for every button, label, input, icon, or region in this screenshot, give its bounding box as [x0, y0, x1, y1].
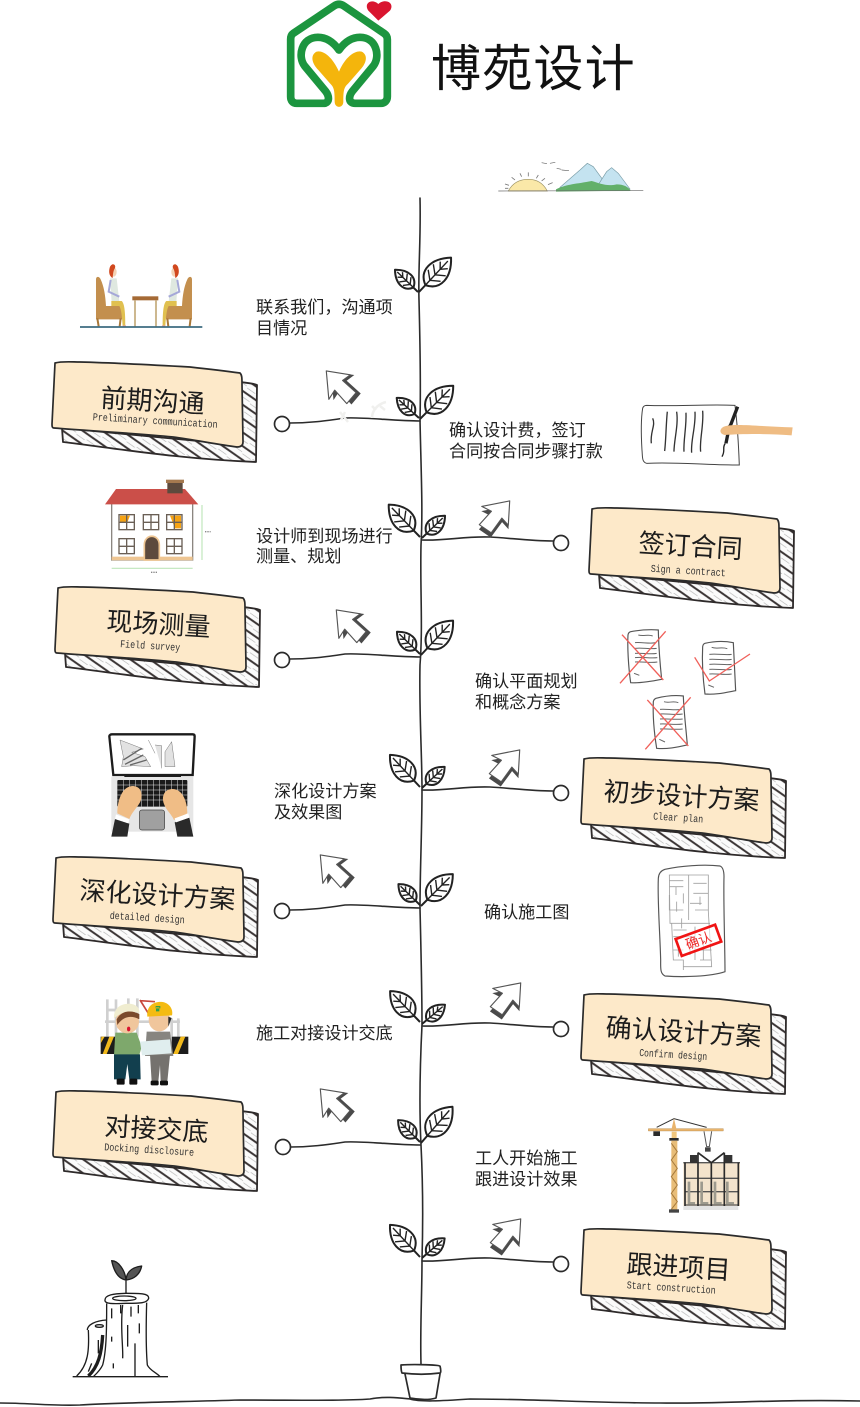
icon: rejected and approved drafts — [620, 630, 750, 749]
description: step 3: 测量、规划 — [256, 547, 341, 566]
arrow 2 — [469, 489, 523, 544]
card: 跟进项目 — [581, 1229, 786, 1329]
description: step 1: 联系我们，沟通项 — [256, 298, 393, 317]
arrow 4 — [479, 738, 533, 793]
card: 前期沟通: 前期沟通 — [100, 383, 205, 419]
card: 签订合同: 签订合同 — [638, 528, 743, 564]
icon: two construction workers — [101, 998, 188, 1085]
description: step 6: 确认施工图 — [484, 903, 569, 922]
card: 跟进项目: 跟进项目 — [626, 1249, 731, 1285]
icon: hands typing on laptop — [109, 734, 195, 837]
card: 初步设计方案: Clear plan — [653, 811, 703, 827]
card: 初步设计方案 — [581, 758, 786, 858]
arrow 7 — [308, 1077, 362, 1131]
description: step 4: 确认平面规划 — [475, 672, 578, 691]
card: 跟进项目: Start construction — [626, 1280, 716, 1298]
description: step 5: 及效果图 — [274, 803, 342, 822]
icon: crane and building — [648, 1118, 740, 1213]
card: 确认设计方案: Confirm design — [639, 1048, 707, 1064]
faint wheat decoration — [340, 402, 386, 422]
description: step 4: 和概念方案 — [475, 692, 560, 712]
arrow 6 — [480, 971, 534, 1026]
description: step 8: 跟进设计效果 — [475, 1170, 578, 1189]
icon: approved floor plan with stamp: 确认 — [684, 929, 714, 952]
description: step 2: 确认设计费，签订 — [449, 421, 586, 440]
card: 签订合同 — [589, 508, 794, 608]
arrow 1 — [314, 359, 368, 413]
card: 对接交底 — [53, 1091, 258, 1191]
icon: sunrise and mountains — [498, 162, 643, 192]
logo: green house outline — [291, 4, 387, 103]
logo mark — [291, 1, 391, 107]
card: 对接交底: 对接交底 — [104, 1111, 209, 1147]
card: 签订合同: Sign a contract — [650, 564, 726, 580]
card: 确认设计方案 — [581, 994, 786, 1094]
card: 深化设计方案: detailed design — [109, 911, 185, 927]
description: step 7: 施工对接设计交底 — [256, 1024, 393, 1043]
leaves along stem — [381, 250, 461, 1264]
arrow 3 — [324, 598, 378, 652]
card: 前期沟通 — [52, 362, 257, 462]
brand name: 博苑设计 — [431, 41, 636, 97]
icon: two people meeting at a table — [80, 264, 202, 327]
card: 初步设计方案: 初步设计方案 — [603, 776, 760, 816]
card: 前期沟通: Preliminary communication — [92, 412, 218, 432]
card: 现场测量 — [55, 587, 260, 687]
description: step 1: 目情况 — [256, 319, 307, 338]
icon: signing a contract — [641, 405, 793, 465]
arrow 5 — [308, 843, 362, 897]
card: 深化设计方案: 深化设计方案 — [79, 875, 236, 915]
plant stem — [419, 198, 423, 1364]
card: 深化设计方案 — [53, 857, 258, 957]
card: 现场测量: 现场测量 — [106, 606, 211, 642]
arrow 8 — [480, 1207, 534, 1262]
card: 对接交底: Docking disclosure — [104, 1142, 194, 1160]
description: step 8: 工人开始施工 — [475, 1149, 578, 1168]
description: step 5: 深化设计方案 — [274, 782, 377, 801]
illustration: tree stump with sprout — [73, 1261, 168, 1377]
flower pot — [401, 1365, 441, 1400]
ground line — [0, 1397, 860, 1405]
description: step 3: 设计师到现场进行 — [256, 527, 393, 546]
card: 确认设计方案: 确认设计方案 — [605, 1012, 762, 1052]
card: 现场测量: Field survey — [120, 639, 180, 655]
logo: red heart — [367, 1, 391, 21]
icon: approved floor plan with stamp — [658, 865, 725, 977]
description: step 2: 合同按合同步骤打款 — [449, 442, 603, 461]
branches and end circles — [274, 416, 568, 1272]
icon: house with dimensions — [105, 480, 211, 572]
logo: yellow sprout — [312, 51, 366, 107]
